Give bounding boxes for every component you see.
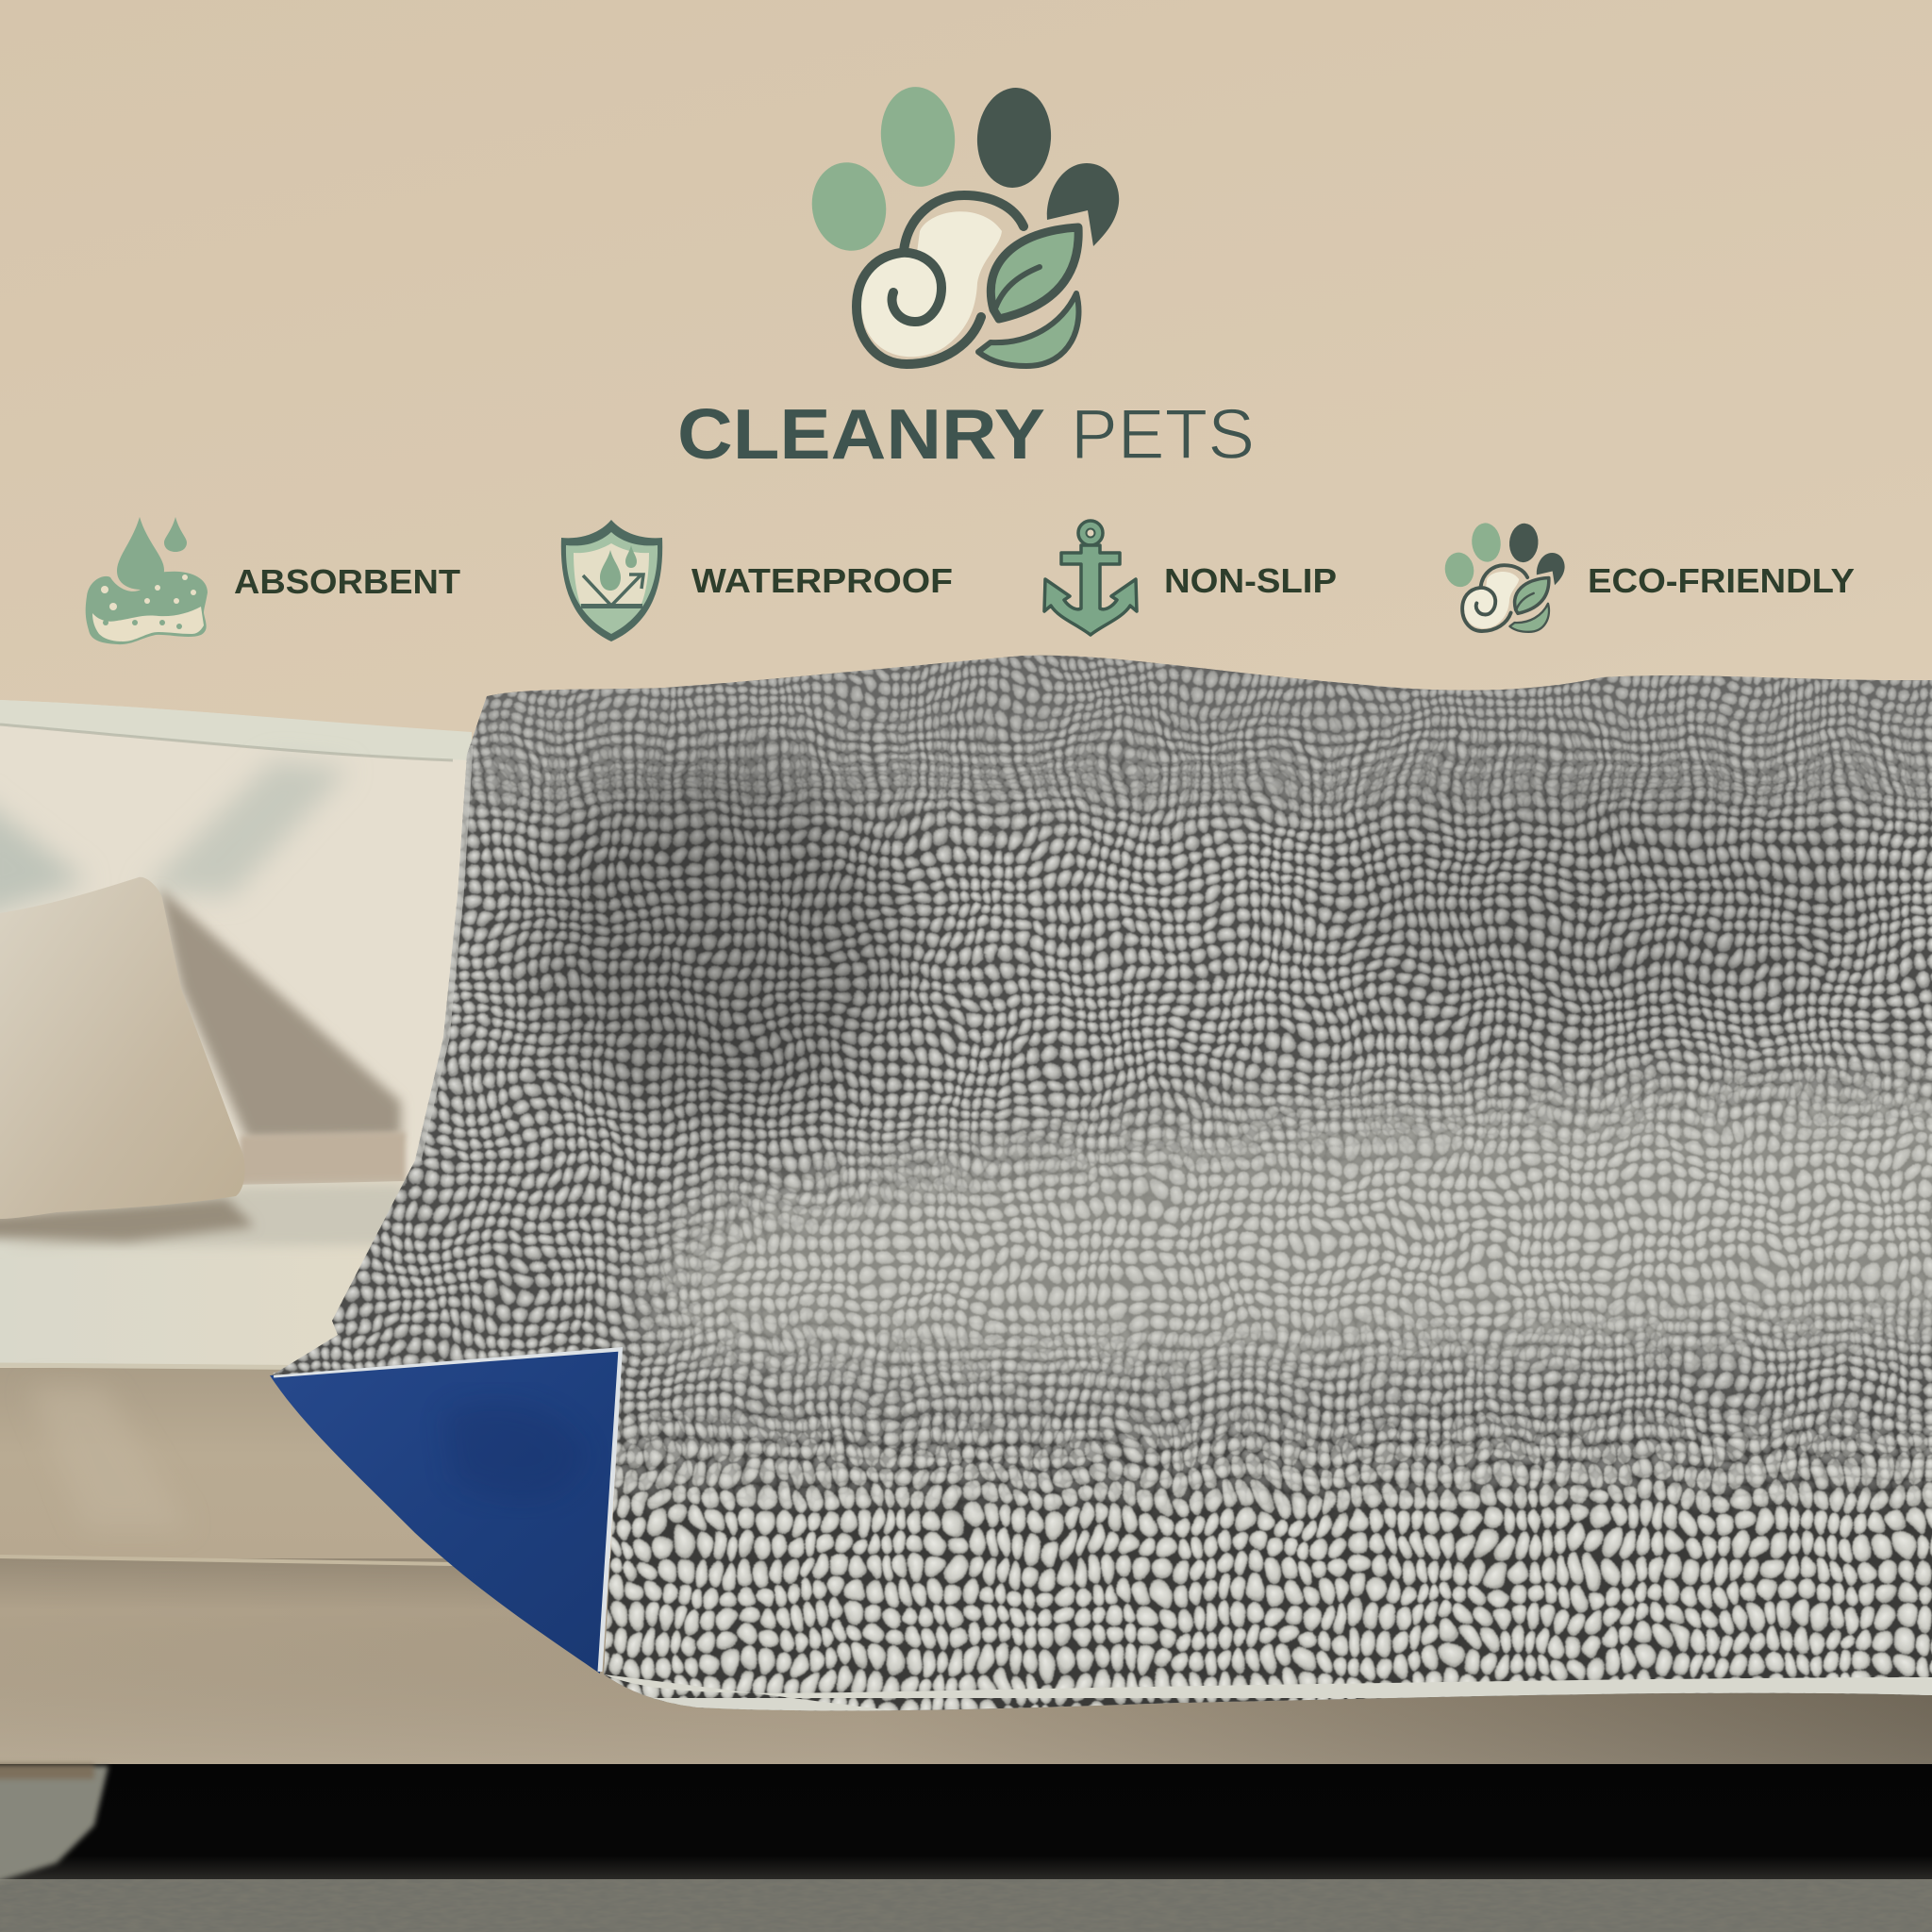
tone: dim right upper [1321,783,1887,1028]
muted upper chenille strip [464,655,1932,838]
bounce arrow [583,575,643,606]
coarse lower chenille texture [604,1393,1932,1711]
shadow behind pillow [158,887,401,1140]
icon: sponge and drops [86,517,208,644]
white piping [274,1349,621,1672]
seat panel crease [28,1387,189,1528]
shield outline [561,520,662,641]
grey chenille blanket [272,655,1932,1711]
blue fabric [270,1349,621,1674]
swirl outline [857,195,1024,364]
logo paw [805,83,1119,366]
shadow under pillow [0,1198,255,1241]
shield face [574,543,649,604]
label: WATERPROOF [691,561,953,600]
sofa top piping band [0,700,472,760]
sofa [0,700,1932,1764]
blanket blue underside fold [270,1349,621,1674]
feature: eco-friendly [1442,522,1855,632]
sponge [86,572,208,644]
gap between cushions [236,1132,406,1187]
feature: waterproof [561,520,953,641]
drops [600,550,621,591]
soft pale middle chenille [606,1032,1932,1424]
sponge holes [101,575,196,610]
blanket bottom hem [604,1674,1932,1711]
toes [876,83,959,191]
sponge cream band [92,607,204,641]
icon: shield [561,520,662,641]
tone: dark patch upper left [528,764,906,1123]
piping seam [0,724,453,760]
icon: anchor [1044,521,1137,635]
PETS: PETS [1071,394,1255,474]
leaf vein [994,267,1040,311]
label: NON-SLIP [1164,561,1337,600]
shadow under sofa [0,1762,1932,1879]
feature: non-slip [1044,521,1337,635]
base piping [0,1557,453,1564]
lower crescent [978,293,1078,366]
seat piping [0,1365,358,1368]
surface line [581,604,642,608]
fabric shading [443,1402,585,1500]
label: ABSORBENT [234,562,460,601]
cushion fold shadows [0,760,349,920]
base fine chenille texture [272,655,1932,1711]
big drop [117,517,164,590]
brand name [677,394,1255,474]
feature: absorbent [86,517,460,644]
carpet floor [0,1873,1932,1932]
sofa base [0,1558,1932,1764]
icon: small paw logo [1442,522,1565,632]
label: ECO-FRIENDLY [1588,561,1855,600]
shield inner [566,532,658,634]
leaf [991,227,1078,319]
pale left hem [417,745,469,1160]
small drop [164,517,187,552]
CLEANRY: CLEANRY [677,394,1045,474]
pillow [0,877,245,1219]
floor object under sofa [0,1764,108,1887]
sofa back cushion [0,700,472,1255]
upper seat shade [0,1184,406,1247]
seat cushion [0,1181,415,1368]
seat front panel [0,1368,443,1558]
cream body [861,211,1002,357]
